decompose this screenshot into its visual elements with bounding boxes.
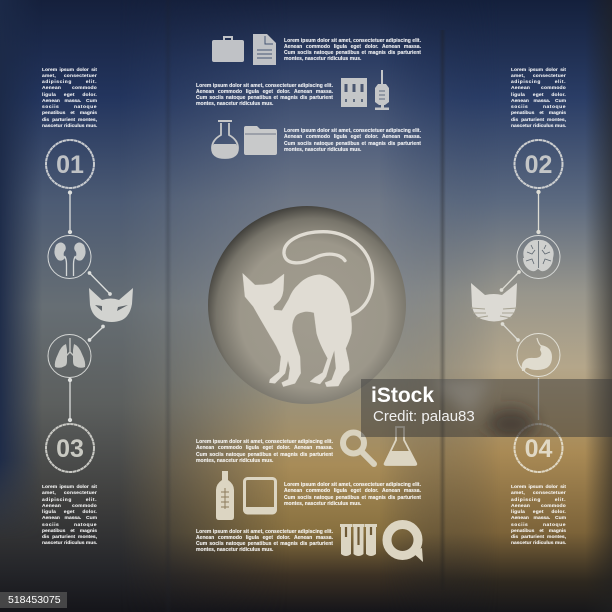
- text block: bottom right: amet, consectetuer: [511, 491, 566, 496]
- icon: lungs in circle: [48, 334, 91, 378]
- text block: bottom right: sociis natoque: [511, 522, 566, 528]
- text block: bottom right: ligula eget dolor.: [511, 510, 566, 515]
- text block: top left: [42, 67, 98, 129]
- badge: 04: [514, 424, 562, 472]
- text block: bottom left: amet, consectetuer: [42, 491, 97, 496]
- image id tag: [0, 592, 67, 608]
- text block: center row 3: [284, 128, 421, 153]
- text block: bottom left: Aenean commodo: [42, 504, 97, 509]
- text block: top right: nascetur ridiculus mus.: [511, 124, 566, 129]
- text block: bottom left: Aenean massa. Cum: [42, 516, 97, 521]
- badge: 02: 02: [525, 151, 552, 179]
- text block: center row 4: [196, 438, 333, 464]
- text block: bottom right: nascetur ridiculus mus.: [511, 541, 566, 546]
- text block: bottom left: Lorem ipsum dolor sit: [42, 485, 97, 490]
- text block: center row 2: montes, nascetur ridiculus mus.: [196, 101, 273, 107]
- icon: speech bubble search: [387, 524, 423, 562]
- text block: top left: dis parturient montes,: [42, 118, 97, 122]
- text block: center row 5: Aenean commodo ligula eget dolor. Aenean massa.: [284, 488, 421, 494]
- text block: top right: [511, 67, 566, 129]
- icon: test tubes: [340, 524, 377, 556]
- arrows: left column connectors: [68, 191, 111, 422]
- badge: 04: 04: [525, 435, 552, 463]
- text block: bottom left: penatibus et magnis: [42, 529, 97, 534]
- icon: brain in circle: [517, 236, 560, 278]
- icon: pill blister: [341, 78, 367, 107]
- text block: center row 3: Cum sociis natoque penatibus et magnis dis parturient: [284, 140, 421, 146]
- icon: syringe: [375, 70, 389, 110]
- illustration: arched cat: [243, 232, 373, 387]
- text block: top right: adipiscing elit.: [511, 80, 566, 85]
- icon: cat face with whiskers: [471, 283, 517, 322]
- text block: center row 6: Aenean commodo ligula eget dolor. Aenean massa.: [196, 535, 333, 541]
- badge: 03: 03: [56, 435, 84, 463]
- badge: 01: 01: [56, 151, 84, 179]
- icon: document: [253, 34, 276, 65]
- text block: top left: Lorem ipsum dolor sit: [42, 68, 97, 72]
- text block: bottom left: nascetur ridiculus mus.: [42, 541, 97, 546]
- watermark band: iStock credit: iStock: [371, 384, 434, 407]
- badge: 02: [514, 140, 562, 188]
- text block: center row 1: Aenean commodo ligula eget dolor. Aenean massa.: [284, 44, 421, 50]
- text block: center row 4: Aenean commodo ligula eget dolor. Aenean massa.: [196, 445, 333, 451]
- text block: bottom right: adipiscing elit.: [511, 498, 566, 502]
- text block: bottom right: dis parturient montes,: [511, 535, 566, 540]
- text block: top right: Lorem ipsum dolor sit: [511, 68, 566, 72]
- text block: top right: dis parturient montes,: [511, 118, 566, 122]
- text block: top left: penatibus et magnis: [42, 111, 97, 116]
- text block: bottom right: Aenean massa. Cum: [511, 516, 566, 521]
- text block: top left: Aenean massa. Cum: [42, 99, 97, 104]
- icon: bottle thermometer: [216, 471, 234, 520]
- text block: top right: ligula eget dolor.: [511, 92, 566, 98]
- icon: kidneys in circle: [48, 236, 91, 278]
- text block: center row 2: [196, 82, 333, 107]
- text block: center row 1: Lorem ipsum dolor sit amet, consectetuer adipiscing elit.: [284, 38, 421, 44]
- text block: center row 1: montes, nascetur ridiculus mus.: [284, 56, 361, 62]
- text block: bottom left: adipiscing elit.: [42, 498, 97, 502]
- icon: folder: [244, 126, 277, 155]
- text block: center row 5: [284, 482, 421, 507]
- icon: conical flask: [384, 427, 416, 465]
- text block: center row 2: Aenean commodo ligula eget dolor. Aenean massa.: [196, 89, 333, 95]
- watermark band: iStock credit: [361, 379, 612, 437]
- text block: center row 6: montes, nascetur ridiculus mus.: [196, 547, 273, 553]
- text block: top left: ligula eget dolor.: [42, 92, 97, 98]
- text block: bottom right: [511, 484, 566, 546]
- text block: top right: Aenean massa. Cum: [511, 99, 566, 104]
- icon: briefcase: [212, 36, 244, 62]
- text block: center row 4: Lorem ipsum dolor sit amet, consectetuer adipiscing elit.: [196, 439, 333, 445]
- text block: center row 6: Cum sociis natoque penatibus et magnis dis parturient: [196, 541, 333, 547]
- icon: stomach in circle: [517, 334, 560, 376]
- text block: top left: Aenean commodo: [42, 86, 97, 91]
- text block: center row 3: Lorem ipsum dolor sit amet, consectetuer adipiscing elit.: [284, 128, 421, 134]
- text block: center row 2: Cum sociis natoque penatibus et magnis dis parturient: [196, 95, 333, 101]
- text block: bottom right: Lorem ipsum dolor sit: [511, 485, 566, 490]
- text block: center row 1: Cum sociis natoque penatibus et magnis dis parturient: [284, 50, 421, 56]
- icon: round flask: [212, 120, 238, 158]
- icon: magnifier: [343, 432, 374, 464]
- text block: top right: penatibus et magnis: [511, 111, 566, 116]
- text block: bottom left: sociis natoque: [42, 522, 97, 528]
- badge: 03: [46, 424, 94, 472]
- panel: central circle with cat: [208, 206, 406, 404]
- text block: bottom left: ligula eget dolor.: [42, 510, 97, 515]
- text block: top right: Aenean commodo: [511, 86, 566, 91]
- icon: cat face with angry eyes: [89, 288, 133, 322]
- text block: center row 2: Lorem ipsum dolor sit amet, consectetuer adipiscing elit.: [196, 82, 333, 88]
- text block: center row 5: montes, nascetur ridiculus mus.: [284, 501, 361, 507]
- text block: center row 4: Cum sociis natoque penatibus et magnis dis parturient: [196, 452, 333, 458]
- text block: center row 6: Lorem ipsum dolor sit amet, consectetuer adipiscing elit.: [196, 528, 333, 534]
- text block: bottom left: [42, 484, 98, 546]
- arrows: right column connectors: [500, 190, 540, 420]
- text block: center row 3: Aenean commodo ligula eget dolor. Aenean massa.: [284, 134, 421, 140]
- text block: center row 6: [196, 528, 333, 553]
- text block: bottom right: Aenean commodo: [511, 504, 566, 509]
- text block: top right: sociis natoque: [511, 105, 566, 110]
- text block: center row 1: [284, 38, 421, 62]
- text block: top left: amet, consectetuer: [42, 74, 97, 79]
- badge: 01: [46, 140, 94, 188]
- text block: bottom left: dis parturient montes,: [42, 535, 97, 540]
- text block: center row 4: montes, nascetur ridiculus mus.: [196, 458, 273, 464]
- text block: top right: amet, consectetuer: [511, 74, 566, 79]
- watermark band: iStock credit: Credit: palau83: [373, 408, 475, 425]
- text block: top left: adipiscing elit.: [42, 80, 97, 85]
- text block: center row 3: montes, nascetur ridiculus mus.: [284, 147, 361, 153]
- icon: square tablet: [244, 478, 276, 513]
- text block: center row 5: Cum sociis natoque penatibus et magnis dis parturient: [284, 494, 421, 500]
- text block: top left: nascetur ridiculus mus.: [42, 124, 97, 129]
- text block: bottom right: penatibus et magnis: [511, 529, 566, 534]
- image id tag: 518453075: [8, 594, 61, 606]
- text block: top left: sociis natoque: [42, 105, 97, 110]
- text block: center row 5: Lorem ipsum dolor sit amet, consectetuer adipiscing elit.: [284, 482, 421, 488]
